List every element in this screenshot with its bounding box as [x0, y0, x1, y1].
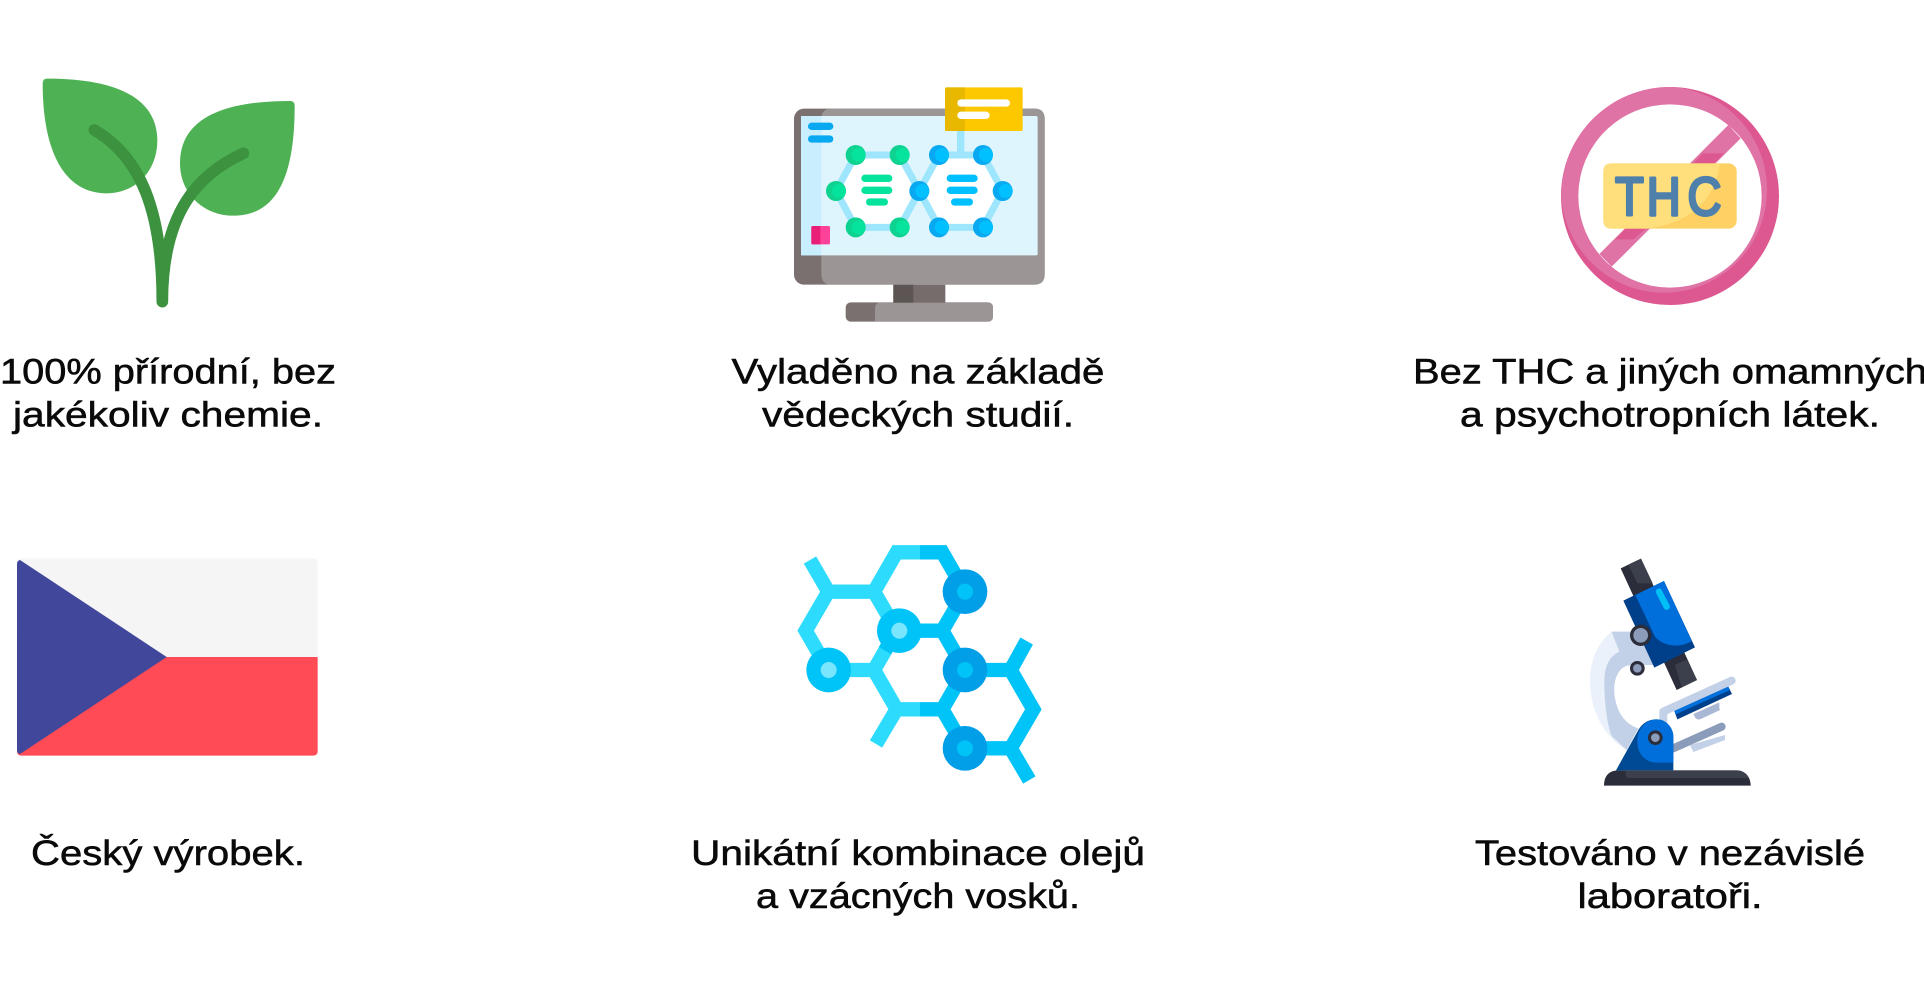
icon: hexagonal molecule — [806, 552, 1033, 780]
text: science: Vyladěno na základě — [732, 352, 1104, 392]
icon: green sprout — [43, 79, 295, 302]
text: natural: jakékoliv chemie. — [12, 396, 323, 434]
panel: independent lab — [1475, 559, 1865, 916]
icon: prohibited THC sign — [1561, 87, 1779, 305]
text: independent lab: Testováno v nezávislé — [1475, 834, 1865, 873]
icon: prohibited THC sign: THC — [1615, 167, 1721, 227]
panel: no THC — [1413, 87, 1924, 435]
panel: science — [732, 87, 1104, 434]
icon: Czech flag — [17, 558, 318, 756]
text: oils and waxes: Unikátní kombinace olejů — [691, 834, 1145, 873]
text: Czech product: Český výrobek. — [31, 834, 305, 873]
text: science — [732, 352, 1104, 434]
text: no THC — [1413, 352, 1924, 434]
text: oils and waxes — [691, 834, 1145, 916]
panel: natural — [0, 79, 336, 434]
text: oils and waxes: a vzácných vosků. — [756, 877, 1080, 916]
text: natural: 100% přírodní, bez — [0, 352, 336, 392]
text: no THC: a psychotropních látek. — [1460, 396, 1880, 434]
text: natural — [0, 352, 336, 434]
panel: oils and waxes — [691, 552, 1145, 916]
panel: Czech product — [17, 558, 318, 873]
icon: computer monitor with molecule — [794, 87, 1045, 322]
text: independent lab: laboratoři. — [1578, 877, 1762, 916]
icon: microscope — [1590, 559, 1751, 786]
text: independent lab — [1475, 834, 1865, 916]
text: no THC: Bez THC a jiných omamných — [1413, 352, 1924, 392]
text: science: vědeckých studií. — [762, 396, 1074, 434]
